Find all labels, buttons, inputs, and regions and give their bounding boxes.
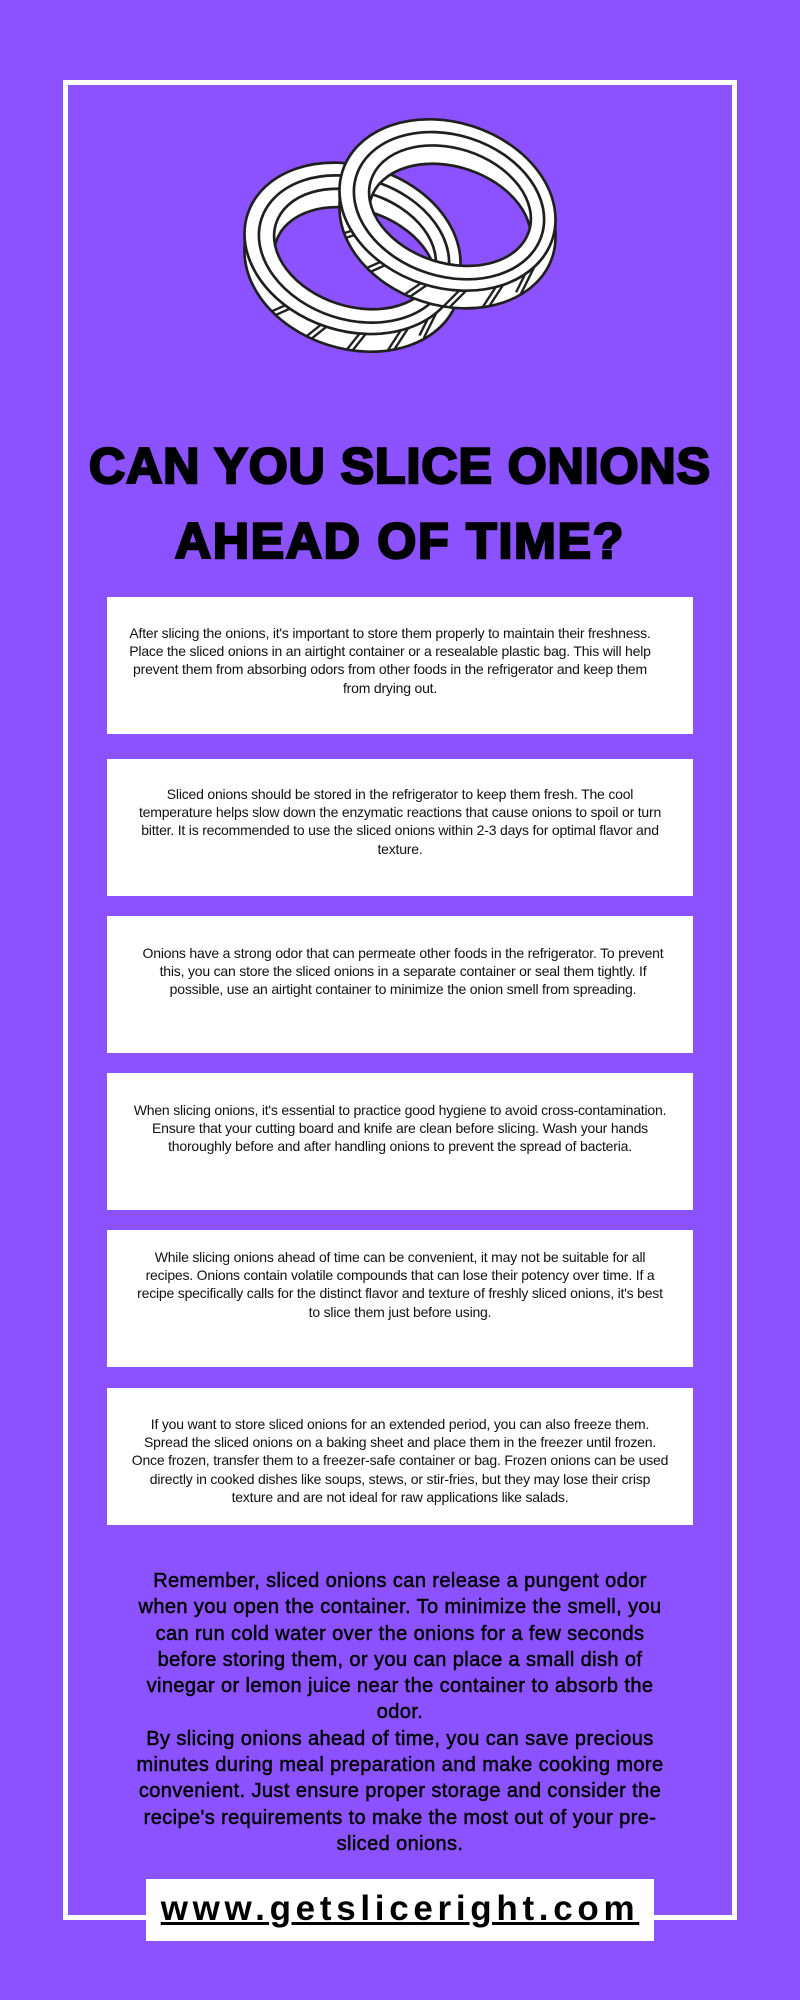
icon: interlocked onion rings [243, 118, 557, 353]
panel: refrigerate: temperature helps slow down the enzymatic reactions that cause onions to spoil or turn [139, 804, 661, 820]
panel: freezing [107, 1388, 693, 1525]
front ring [338, 118, 557, 310]
closing text [136, 1570, 664, 1855]
panel: freezing: Spread the sliced onions on a baking sheet and place them in the freezer until frozen. [144, 1434, 656, 1450]
panel: storing properly [107, 597, 693, 734]
panel: storing properly: from drying out. [343, 680, 437, 696]
closing text: when you open the container. To minimize the smell, you [138, 1596, 662, 1618]
panel: hygiene: Ensure that your cutting board and knife are clean before slicing. Wash your hands [152, 1120, 648, 1136]
panel: freezing: If you want to store sliced onions for an extended period, you can also freeze them. [151, 1416, 649, 1432]
panel: recipes: recipes. Onions contain volatile compounds that can lose their potency over time. If a [146, 1267, 654, 1283]
white frame [63, 80, 737, 1920]
closing text: before storing them, or you can place a small dish of [158, 1649, 642, 1671]
panel: odor: this, you can store the sliced onions in a separate container or seal them tightly. If [160, 963, 646, 979]
title: AHEAD OF TIME? [175, 513, 625, 569]
panel: refrigerate [107, 759, 693, 896]
back ring [243, 161, 462, 353]
panel: refrigerate: Sliced onions should be stored in the refrigerator to keep them fresh. The cool [167, 786, 633, 802]
panel: odor: possible, use an airtight container to minimize the onion smell from spreading. [170, 981, 636, 997]
closing text: recipe's requirements to make the most out of your pre- [144, 1807, 656, 1829]
panel: hygiene: thoroughly before and after handling onions to prevent the spread of bacteria. [168, 1138, 632, 1154]
panel: recipes [107, 1230, 693, 1367]
panel: odor [107, 916, 693, 1053]
panel: freezing: texture and are not ideal for raw applications like salads. [232, 1489, 568, 1505]
panel: storing properly: Place the sliced onions in an airtight container or a resealable plastic bag. This will help [129, 643, 651, 659]
panel: storing properly: prevent them from absorbing odors from other foods in the refrigerator and keep them [133, 661, 647, 677]
panel: freezing: Once frozen, transfer them to a freezer-safe container or bag. Frozen onions can be used [132, 1452, 668, 1468]
panel: recipes: While slicing onions ahead of time can be convenient, it may not be suitable for all [155, 1249, 645, 1265]
closing text: can run cold water over the onions for a few seconds [156, 1623, 644, 1645]
panel: refrigerate: texture. [377, 841, 423, 857]
closing text: vinegar or lemon juice near the container to absorb the [147, 1675, 653, 1697]
website link [146, 1879, 654, 1941]
title [89, 438, 711, 569]
closing text: By slicing onions ahead of time, you can save precious [146, 1728, 654, 1750]
panel: refrigerate: bitter. It is recommended to use the sliced onions within 2-3 days for optimal flavor and [141, 822, 659, 838]
panel: storing properly: After slicing the onions, it's important to store them properly to maintain their freshness. [129, 625, 651, 641]
closing text: minutes during meal preparation and make cooking more [136, 1754, 664, 1776]
closing text: convenient. Just ensure proper storage and consider the [139, 1780, 661, 1802]
panel: freezing: directly in cooked dishes like soups, stews, or stir-fries, but they may lose their crisp [150, 1471, 650, 1487]
closing text: sliced onions. [337, 1833, 463, 1855]
panel: odor: Onions have a strong odor that can permeate other foods in the refrigerator. To prevent [143, 945, 663, 961]
title: CAN YOU SLICE ONIONS [89, 438, 711, 494]
panel: hygiene [107, 1073, 693, 1210]
panel: hygiene: When slicing onions, it's essential to practice good hygiene to avoid cross-contamination. [134, 1102, 666, 1118]
website link: www.getsliceright.com [161, 1889, 639, 1928]
panel: recipes: recipe specifically calls for the distinct flavor and texture of freshly sliced onions, it's best [137, 1285, 663, 1301]
closing text: odor. [377, 1701, 423, 1723]
panel: recipes: to slice them just before using. [309, 1304, 491, 1320]
closing text: Remember, sliced onions can release a pungent odor [153, 1570, 647, 1592]
